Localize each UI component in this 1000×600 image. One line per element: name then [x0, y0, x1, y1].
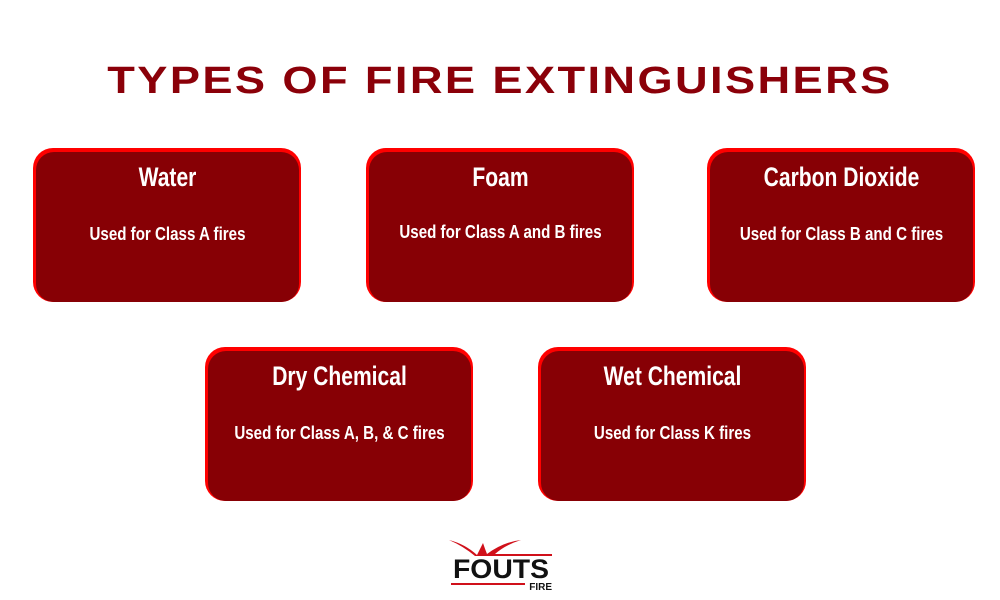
logo: FOUTS: [453, 554, 549, 584]
card: dry chemical: [205, 347, 473, 501]
card: dry chemical: Dry Chemical: [272, 361, 407, 391]
card: water: Used for Class A fires: [89, 224, 246, 244]
card: foam: Used for Class A and B fires: [399, 222, 602, 242]
card: water: Water: [139, 162, 196, 192]
card: dry chemical: Used for Class A, B, & C fires: [234, 423, 445, 443]
card: water: [33, 148, 301, 302]
card: carbon dioxide: [707, 148, 975, 302]
card: wet chemical: Wet Chemical: [604, 361, 741, 391]
title: TYPES OF FIRE EXTINGUISHERS: [107, 60, 893, 102]
card: wet chemical: [538, 347, 806, 501]
card: wet chemical: Used for Class K fires: [594, 423, 751, 443]
card: carbon dioxide: Carbon Dioxide: [764, 162, 919, 192]
card: foam: [366, 148, 634, 302]
logo: [449, 540, 552, 592]
card: carbon dioxide: Used for Class B and C fires: [740, 224, 943, 244]
card: foam: Foam: [472, 162, 529, 192]
